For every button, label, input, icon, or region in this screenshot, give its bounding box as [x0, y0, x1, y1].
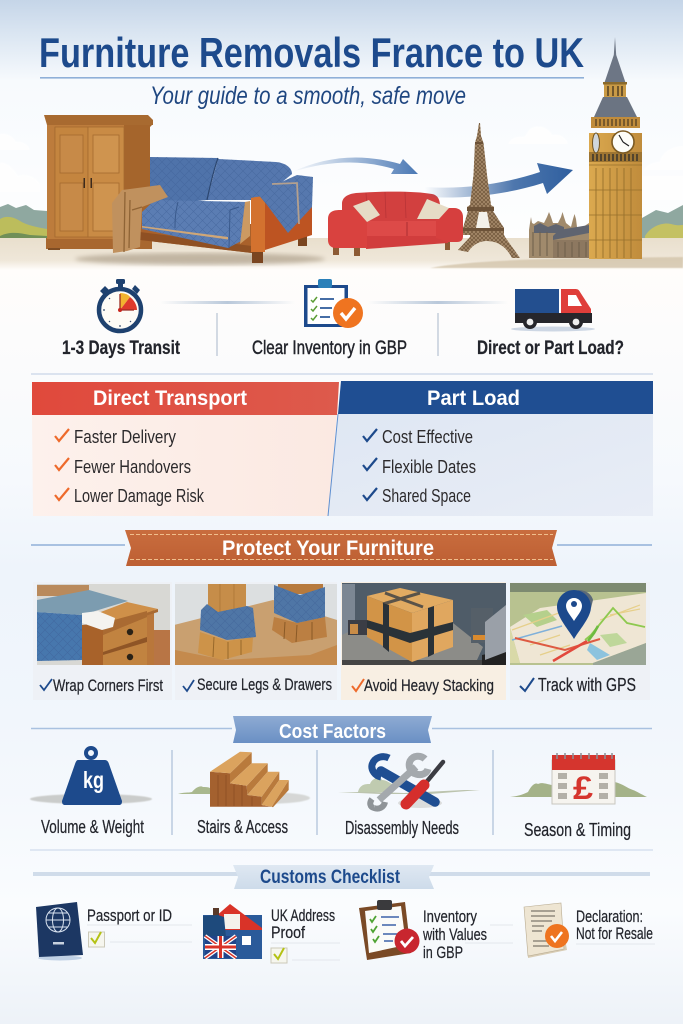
heading: customs checklist — [33, 865, 650, 889]
icon: stairs — [178, 752, 310, 807]
icon: weight — [30, 748, 152, 805]
list: direct transport benefits: Fewer Handovers — [74, 456, 191, 477]
title underline — [40, 77, 584, 79]
cost factor labels: Season & Timing — [524, 820, 631, 840]
heading: cost factors: Cost Factors — [279, 721, 386, 743]
item: passport — [36, 902, 192, 960]
red sofa — [328, 192, 463, 256]
item: inventory with values: Inventory — [423, 907, 477, 926]
subtitle: Your guide to a smooth, safe move — [150, 82, 466, 110]
heading: cost factors — [31, 716, 652, 743]
background trees — [0, 204, 683, 259]
arrow: France to UK — [425, 163, 573, 197]
heading: protect your furniture — [31, 530, 652, 566]
icon: weight: kg — [83, 767, 104, 793]
panel: direct transport: Direct Transport — [93, 387, 247, 410]
tan blanket on left arm — [112, 185, 168, 253]
list: direct transport benefits — [55, 426, 205, 506]
card: wrap corners: Wrap Corners First — [53, 676, 163, 695]
cost factor labels: Stairs & Access — [197, 817, 288, 837]
wooden base — [140, 224, 252, 253]
hero illustration — [0, 37, 683, 270]
blue sofa with moving blankets — [112, 157, 313, 263]
cost factor labels: Volume & Weight — [41, 817, 144, 837]
icon: stopwatch — [99, 279, 141, 331]
card: avoid heavy stacking: Avoid Heavy Stacking — [364, 676, 494, 695]
panel: part load — [328, 381, 653, 516]
card: track with GPS — [510, 582, 650, 700]
fact labels: Direct or Part Load? — [477, 338, 624, 359]
right arm — [265, 197, 312, 250]
item: inventory with values: in GBP — [423, 943, 463, 962]
item: UK address proof — [203, 904, 340, 963]
icon: clipboard with orange tick — [304, 279, 363, 328]
card: track with GPS: Track with GPS — [538, 675, 636, 695]
item: UK address proof: UK Address — [271, 906, 335, 925]
seat cushions — [142, 200, 248, 248]
item: UK address proof: Proof — [271, 923, 305, 942]
sofa feet — [252, 236, 307, 263]
faded connectors — [160, 301, 295, 304]
icon: tools — [338, 756, 480, 809]
ground — [0, 238, 683, 270]
item: declaration not for resale: Declaration: — [576, 907, 643, 926]
dividers — [217, 313, 438, 356]
list: part load benefits: Flexible Dates — [382, 456, 476, 477]
fact labels: 1-3 Days Transit — [62, 338, 181, 359]
Big Ben — [589, 37, 642, 259]
item: declaration not for resale — [524, 903, 655, 958]
fact labels — [62, 338, 624, 359]
column dividers — [172, 750, 493, 835]
icon: truck — [511, 289, 595, 332]
blanket over arm — [257, 175, 313, 233]
heading: customs checklist: Customs Checklist — [260, 867, 401, 888]
list: direct transport benefits: Lower Damage Risk — [74, 485, 205, 506]
panel: protection tips — [33, 582, 650, 700]
cost factor labels: Disassembly Needs — [345, 818, 459, 838]
icon: calendar: £ — [573, 770, 593, 806]
card: secure legs: Secure Legs & Drawers — [197, 675, 332, 694]
card: wrap corners — [33, 582, 172, 700]
item: inventory with values: with Values — [422, 925, 487, 944]
list: part load benefits: Cost Effective — [382, 426, 473, 447]
list: part load benefits — [363, 426, 476, 506]
item: declaration not for resale: Not for Resale — [576, 924, 653, 943]
wardrobe — [44, 115, 153, 250]
panel: direct transport — [32, 382, 339, 516]
back cushions — [150, 157, 218, 206]
item: passport: Passport or ID — [87, 906, 172, 925]
panel: cost factors — [30, 748, 647, 840]
background clouds — [0, 127, 683, 200]
panel: customs checklist — [36, 900, 655, 963]
key facts row — [62, 279, 624, 359]
icon: calendar — [510, 753, 647, 806]
item: inventory with values — [359, 900, 513, 962]
list: part load benefits: Shared Space — [382, 485, 471, 506]
Eiffel Tower — [458, 123, 520, 258]
arrow: first move — [292, 157, 418, 174]
Westminster palace — [529, 212, 592, 258]
card: avoid heavy stacking — [341, 582, 506, 700]
heading: protect your furniture: Protect Your Furniture — [222, 537, 434, 560]
cost factor labels — [41, 817, 631, 840]
list: direct transport benefits: Faster Delivery — [74, 426, 177, 447]
card: secure legs — [174, 582, 337, 700]
fact labels: Clear Inventory in GBP — [252, 338, 407, 359]
panel: part load: Part Load — [427, 387, 520, 410]
